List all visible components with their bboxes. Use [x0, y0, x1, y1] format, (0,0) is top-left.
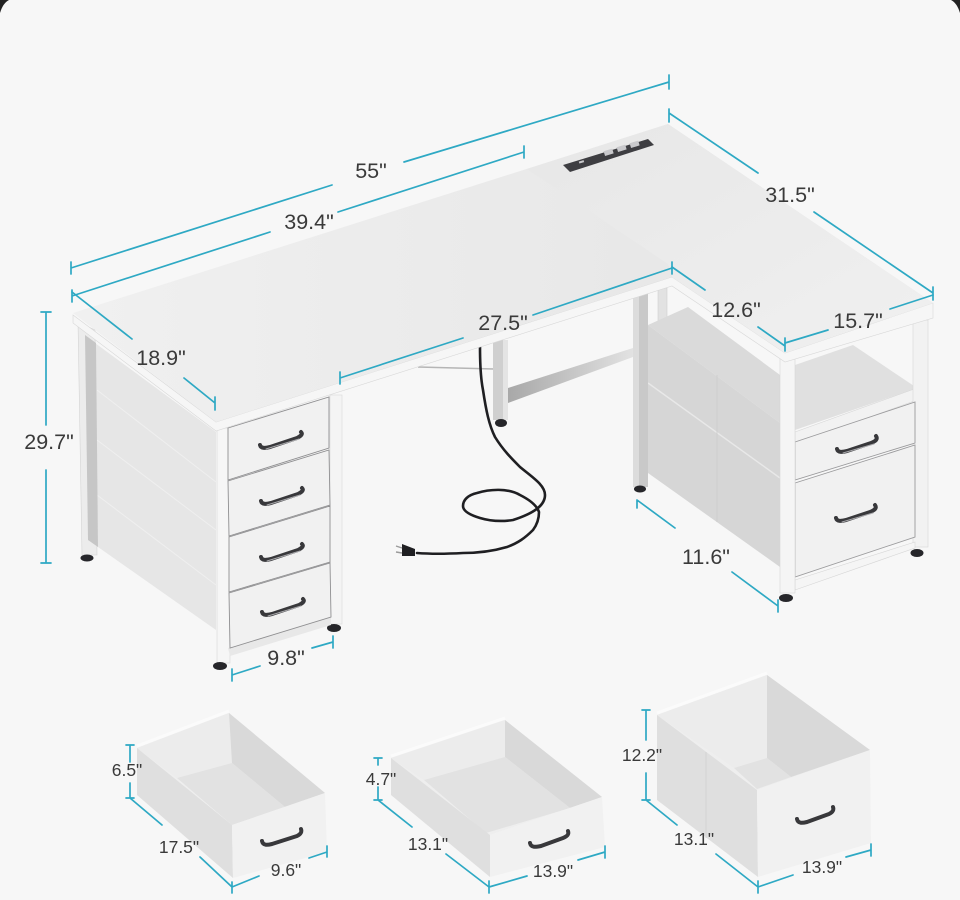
dimension: 27.5 inch	[340, 262, 672, 384]
box 1 dimensions: 6.5"	[112, 760, 142, 780]
box 1 dimensions	[112, 745, 327, 893]
dimension: 39.4 inch: 39.4"	[284, 210, 334, 234]
dimension: 55 inch: 55"	[355, 159, 387, 183]
right cabinet	[633, 291, 928, 602]
box 2 dimensions: 13.1"	[408, 834, 448, 854]
dark rounded corners	[0, 0, 960, 13]
box 1 handle	[262, 829, 301, 845]
dimension: 11.6 inch	[637, 500, 778, 612]
dimension: 12.6 inch	[672, 267, 785, 351]
box 2 dimensions: 13.9"	[533, 861, 573, 881]
box 2 dimensions: 4.7"	[366, 769, 396, 789]
dimension: 29.7 inch: 29.7"	[24, 430, 74, 454]
drawer stack	[228, 397, 331, 648]
dimension: 11.6 inch: 11.6"	[682, 545, 730, 569]
box 2 handle	[530, 831, 568, 847]
dimension: 27.5 inch: 27.5"	[478, 311, 528, 335]
dimension: 18.9 inch	[72, 292, 215, 410]
cabinet handles	[836, 436, 877, 522]
dimension: 12.6 inch: 12.6"	[711, 298, 761, 322]
drawer handles	[260, 432, 304, 616]
box 1 dimensions: 17.5"	[159, 837, 199, 857]
dimension: 15.7 inch	[785, 295, 933, 343]
dimension: 31.5 inch: 31.5"	[765, 183, 815, 207]
power cord and plug	[396, 347, 545, 556]
box 1	[137, 711, 327, 878]
box 1 dimensions: 9.6"	[271, 860, 301, 880]
dimension: 15.7 inch: 15.7"	[833, 309, 883, 333]
box 3 dimensions: 13.9"	[802, 857, 842, 877]
rear leg and crossbar	[418, 288, 667, 427]
desktop surface	[73, 124, 933, 431]
box 2 dimensions	[366, 758, 605, 893]
power strip	[563, 139, 654, 172]
box 3	[657, 673, 871, 877]
box 3 dimensions	[622, 710, 871, 893]
box 3 dimensions: 13.1"	[674, 829, 714, 849]
box 3 handle	[797, 807, 833, 823]
cabinet drawers	[795, 402, 915, 577]
box 3 dimensions: 12.2"	[622, 745, 662, 765]
dimension: 9.8 inch	[232, 636, 333, 681]
left desk pedestal	[78, 322, 342, 670]
dimension: 55 inch	[71, 75, 669, 274]
box 2	[391, 718, 605, 877]
dimension: 31.5 inch	[669, 109, 933, 300]
dimension: 29.7 inch	[24, 312, 74, 563]
dimension: 39.4 inch	[72, 146, 524, 302]
dimension: 9.8 inch: 9.8"	[267, 646, 305, 670]
dimension: 18.9 inch: 18.9"	[136, 346, 186, 370]
